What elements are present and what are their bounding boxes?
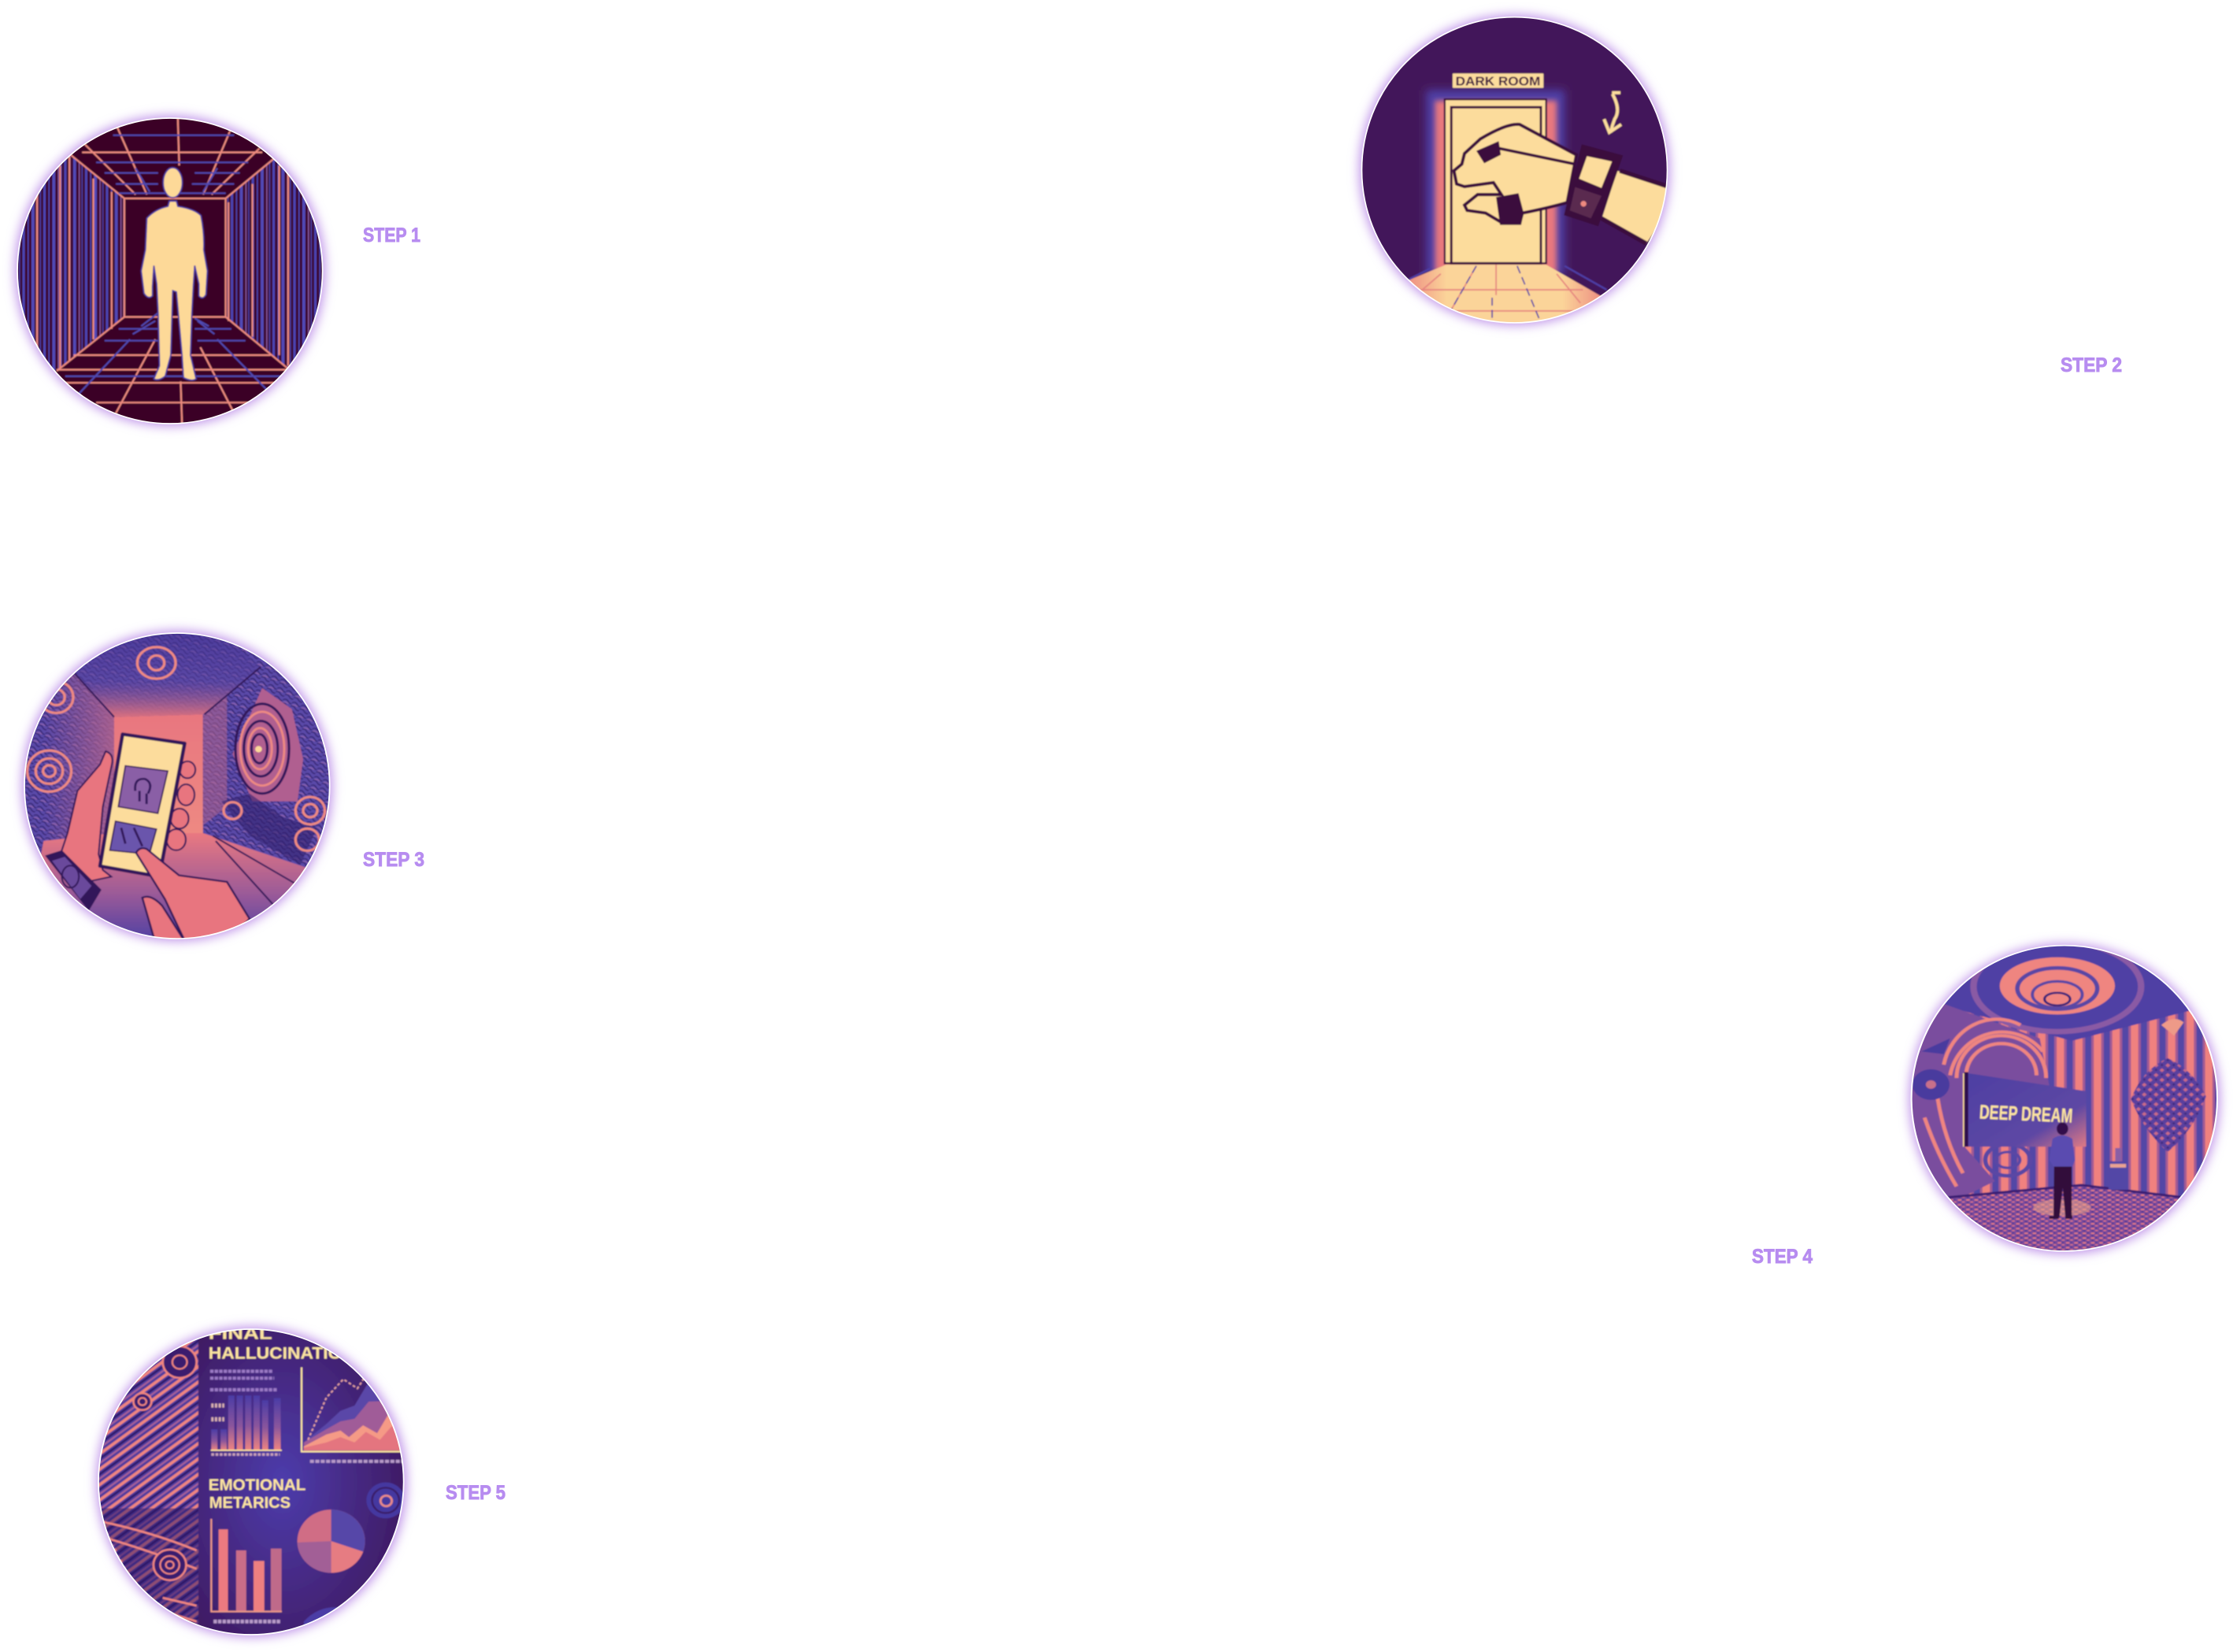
ceiling (75, 628, 261, 717)
heading: final hallucination: FINAL (209, 1324, 272, 1343)
door (1445, 99, 1546, 263)
illustration: person facing deep dream screen (1905, 940, 2225, 1258)
person from behind (2050, 1122, 2075, 1219)
label: step 3: STEP 3 (363, 849, 424, 871)
icon: squiggle arrow (1604, 93, 1621, 132)
area chart (302, 1368, 405, 1461)
left texture (92, 1324, 198, 1640)
heading: emotional metarics (209, 1476, 306, 1512)
panel: step 1 (12, 113, 420, 429)
waste bin (2109, 1148, 2127, 1190)
pie chart (298, 1509, 365, 1572)
heading: emotional metarics: METARICS (209, 1494, 291, 1512)
icon: smartwatch (1564, 144, 1623, 226)
heading: final hallucination: HALLUCINATIC (209, 1343, 341, 1362)
label: step 2: STEP 2 (2061, 354, 2122, 376)
panel: step 4 (1752, 940, 2225, 1268)
illustration: phone held in psychedelic room (18, 628, 337, 946)
heading: emotional metarics: EMOTIONAL (209, 1476, 306, 1495)
figure silhouette (141, 168, 207, 380)
hand (1454, 124, 1576, 225)
screen: DEEP DREAM (1979, 1101, 2073, 1128)
bar chart (211, 1519, 282, 1621)
panel: step 2 (1357, 12, 2122, 376)
illustration: hand with smartwatch at dark room door (1357, 12, 1672, 329)
pointing hand (136, 848, 250, 946)
door sign: DARK ROOM (1456, 76, 1540, 89)
left wall arcs (1905, 1004, 2050, 1197)
arm (1602, 171, 1672, 243)
label: step 1: STEP 1 (363, 224, 420, 246)
illustration: final hallucination dashboard (92, 1324, 411, 1640)
floor (1408, 265, 1602, 327)
swirl icon (304, 1483, 405, 1640)
panel: step 5 (92, 1324, 505, 1640)
ceiling vortex (1938, 940, 2206, 1041)
heading: final hallucination (209, 1324, 341, 1362)
screen (1964, 1072, 2086, 1146)
right medallion (2131, 1058, 2206, 1152)
label: step 4: STEP 4 (1752, 1246, 1813, 1268)
left hand (61, 751, 195, 883)
striped wall (1953, 1006, 2219, 1197)
right wall (203, 667, 337, 868)
floor (1912, 1185, 2219, 1255)
label: step 5: STEP 5 (446, 1482, 505, 1504)
swirls (28, 647, 325, 850)
gradient bar chart (211, 1395, 282, 1454)
panel: step 3 (18, 628, 424, 946)
illustration: person in grid corridor (12, 113, 327, 429)
text lines (210, 1372, 277, 1390)
wristwatch (45, 850, 102, 911)
smartphone (100, 734, 185, 876)
